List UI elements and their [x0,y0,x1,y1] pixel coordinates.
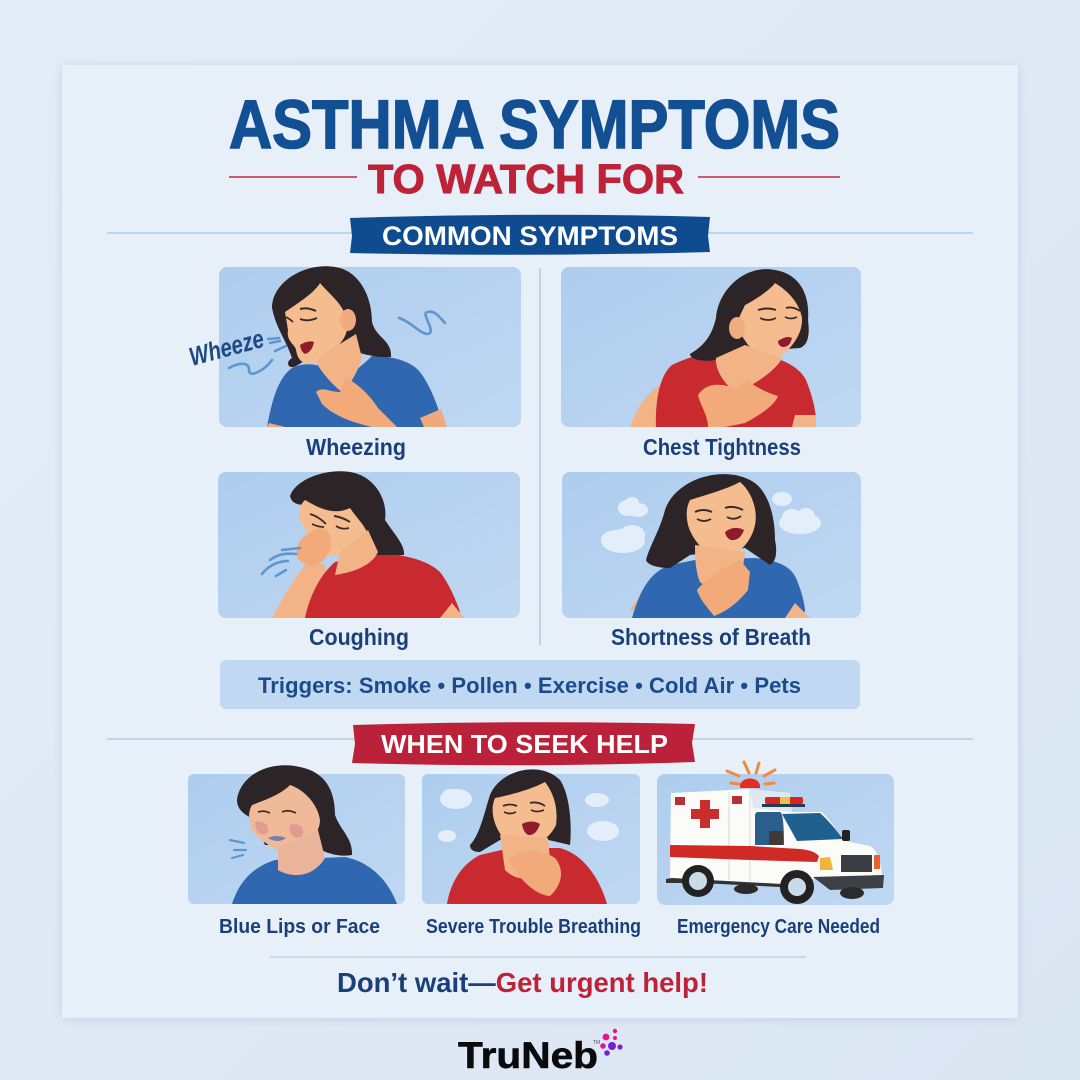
banner: when to seek help [352,722,695,765]
illustration: woman short of breath [630,474,810,618]
air swirls [229,312,445,374]
panel: shortness of breath [562,472,861,618]
panel: blue lips [188,765,405,904]
banner: common symptoms [350,215,710,255]
illustration: woman wheezing [267,266,447,427]
label: wheezing: Wheezing [306,434,406,460]
card panel [62,65,1018,1018]
triggers bar: Triggers: Smoke • Pollen • Exercise • Cold Air • Pets [258,673,801,698]
triggers bar [220,660,860,709]
panel: severe trouble breathing [422,769,640,904]
panel: coughing [218,471,520,618]
label: coughing: Coughing [309,624,409,650]
icon: ambulance [666,762,884,904]
label: emergency care: Emergency Care Needed [677,916,880,938]
banner: common symptoms: COMMON SYMPTOMS [382,221,678,251]
title: ASTHMA SYMPTOMS [229,86,840,163]
logo: TruNeb: TruNeb [458,1035,598,1076]
illustration: person coughing [272,471,464,618]
logo: TruNeb [458,1029,623,1076]
urgent message: Don’t wait—Get urgent help! [337,967,708,998]
panel: wheezing [186,266,521,427]
clouds [438,789,619,842]
label: shortness of breath: Shortness of Breath [611,624,811,650]
cough droplets [262,548,300,576]
label: chest tightness: Chest Tightness [643,434,801,460]
illustration: person with blue lips [230,765,397,904]
illustration: woman with severe trouble breathing [447,769,607,904]
illustration: woman holding chest [630,269,816,427]
banner: when to seek help: WHEN TO SEEK HELP [381,729,668,759]
logo: TruNeb: TM [593,1040,600,1046]
label: severe trouble breathing: Severe Trouble Breathing [426,916,641,938]
subtitle: TO WATCH FOR [368,156,684,202]
panel: emergency care [657,762,894,905]
clouds [601,492,821,553]
panel: chest tightness [561,267,861,427]
label: blue lips: Blue Lips or Face [219,916,380,938]
wheeze label: Wheeze [186,323,267,372]
